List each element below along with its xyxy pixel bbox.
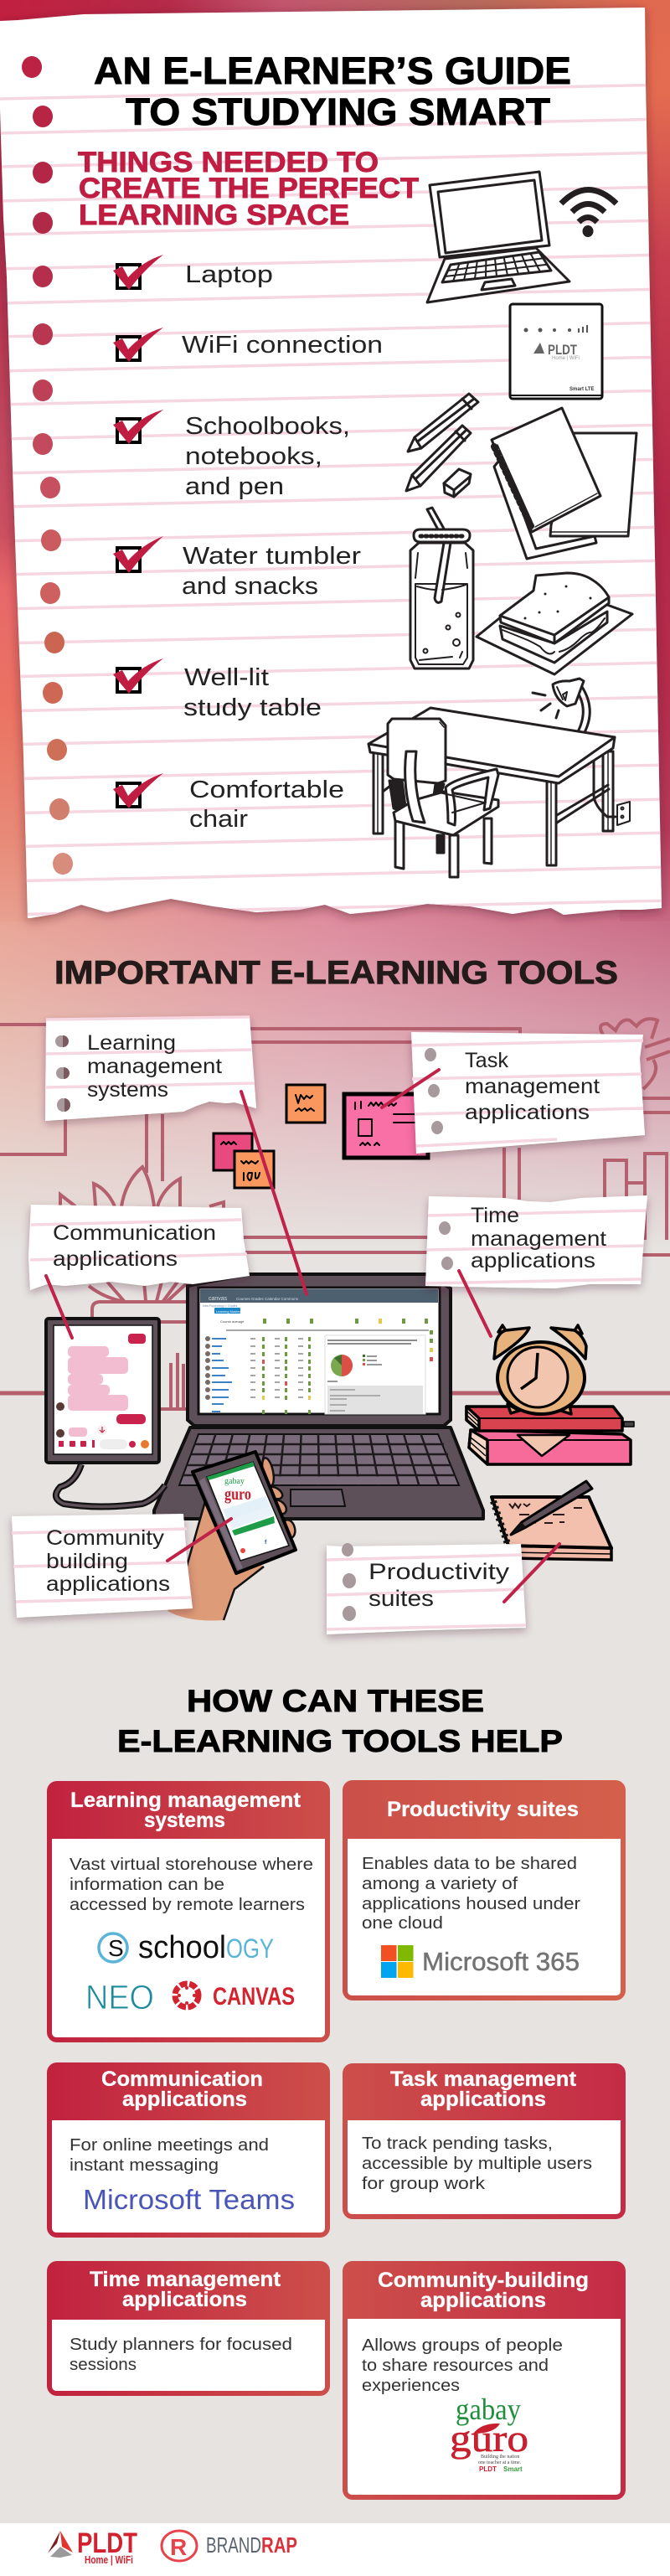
note: community building applications: building: [46, 1550, 128, 1573]
card: learning management systems: Learning management: [70, 1789, 302, 1812]
checklist item: water tumbler: and snacks: [182, 573, 318, 600]
hand holding phone with Gabay Guro: gabay: [224, 1477, 245, 1486]
note: learning management systems: Learning: [87, 1031, 176, 1055]
leader lines from notes to illustration: [46, 1070, 559, 1602]
title: [94, 49, 571, 133]
card: learning management systems: [47, 1781, 330, 2042]
logo: Canvas: [175, 1983, 295, 2011]
card: community-building applications: applications: [420, 2289, 546, 2312]
title: TO STUDYING SMART: [126, 90, 550, 133]
heading: how can these tools help: E-LEARNING TOOLS HELP: [117, 1724, 563, 1758]
screen: canvas gradebook: Intro Psychology > Grades: [203, 1304, 238, 1308]
checklist item: study table: Well-lit: [184, 664, 269, 691]
note: learning management systems: management: [87, 1055, 222, 1078]
logo: Rappler BrandRap: [162, 2531, 297, 2561]
checklist item: water tumbler: [113, 536, 361, 600]
card: productivity suites: among a variety of: [362, 1875, 518, 1893]
logo: PLDT Home WiFi: PLDT: [77, 2527, 137, 2559]
checklist item: study table: [113, 658, 322, 721]
logo: Gabay Guro: [450, 2393, 528, 2473]
checklist item: chair: Comfortable: [189, 777, 344, 803]
icon: study desk and chair: [368, 708, 630, 877]
sticky notes: [214, 1085, 428, 1188]
screen: canvas gradebook: Courses Grades Calendar Commons: [236, 1297, 299, 1301]
icon: PLDT router: Smart LTE: [570, 387, 595, 392]
notepad with pen: [492, 1481, 611, 1560]
heading: things needed: THINGS NEEDED TO: [78, 147, 379, 178]
logo: Gabay Guro: Building the nation: [481, 2455, 519, 2460]
logo: Gabay Guro: Smart: [503, 2465, 523, 2473]
checklist item: water tumbler: Water tumbler: [183, 543, 361, 570]
card: time management applications: Time management: [90, 2268, 281, 2291]
room backdrop line art: [0, 1019, 670, 1410]
icon: PLDT router: Home | WiFi: [552, 356, 580, 361]
card: learning management systems: accessed by remote learners: [70, 1896, 305, 1914]
book stack: [466, 1407, 634, 1464]
clock face: [497, 1342, 585, 1414]
card: communication applications: Communication: [101, 2068, 263, 2091]
laptop with Canvas screen: [154, 1274, 483, 1519]
card: task management applications: applications: [420, 2088, 546, 2111]
card: productivity suites: [343, 1780, 626, 2000]
checklist item: wifi: [113, 328, 383, 362]
heading: things needed: [78, 147, 419, 231]
logo: Rappler BrandRap: RAP: [261, 2532, 297, 2558]
alarm clock on books: [466, 1325, 634, 1464]
card: productivity suites: Enables data to be shared: [362, 1855, 577, 1873]
checklist item: wifi: WiFi connection: [182, 332, 383, 359]
logo: schoology: [99, 1930, 274, 1965]
logo: Gabay Guro: gabay: [456, 2393, 521, 2426]
laptop base and keyboard: [154, 1427, 483, 1519]
logo: Canvas: CANVAS: [213, 1983, 295, 2011]
card: community-building applications: [343, 2261, 626, 2500]
logo: Gabay Guro: PLDT: [479, 2465, 497, 2473]
card: community-building applications: Allows groups of people: [362, 2336, 563, 2355]
logo: NEO: NEO: [85, 1978, 154, 2016]
card: task management applications: To track pending tasks,: [362, 2135, 553, 2153]
card: community-building applications: Community-building: [378, 2269, 589, 2292]
note: learning management systems: systems: [87, 1078, 168, 1102]
card: communication applications: [47, 2062, 330, 2238]
note: task management applications: management: [465, 1075, 600, 1098]
card: time management applications: sessions: [70, 2356, 137, 2374]
laptop lid: [188, 1274, 451, 1426]
note: task management applications: applications: [465, 1101, 590, 1124]
icon: line-art laptop: [427, 172, 570, 302]
icon: PLDT router: [510, 304, 602, 399]
icon: pencils and eraser: [406, 394, 478, 497]
note: communication applications: Communication: [53, 1221, 216, 1245]
checklist item: schoolbooks: notebooks,: [185, 443, 322, 470]
title: AN E-LEARNER’S GUIDE: [94, 49, 571, 92]
note: productivity suites: Productivity: [368, 1559, 510, 1584]
checklist item: schoolbooks: and pen: [185, 473, 284, 500]
logo: Gabay Guro: guro: [450, 2417, 528, 2460]
note: time management applications: [425, 1195, 647, 1288]
note: task management applications: [411, 1032, 645, 1154]
heading: things needed: CREATE THE PERFECT: [79, 173, 419, 204]
logo: schoology: school: [138, 1930, 226, 1965]
hand holding phone with Gabay Guro: f: [265, 1540, 267, 1546]
checklist item: laptop: [113, 255, 273, 290]
logo: schoology: OGY: [226, 1933, 274, 1964]
screen: canvas gradebook: Course average: [220, 1319, 245, 1324]
card: time management applications: applications: [122, 2288, 247, 2311]
screen: canvas gradebook: Learning Mastery: [216, 1309, 242, 1314]
card: community-building applications: experiences: [362, 2377, 460, 2395]
card: community-building applications: to share resources and: [362, 2357, 549, 2375]
note: community building applications: Community: [46, 1526, 165, 1550]
heading: things needed: LEARNING SPACE: [79, 199, 349, 231]
card: learning management systems: information can be: [70, 1876, 224, 1894]
card: learning management systems: systems: [144, 1809, 225, 1832]
note: communication applications: applications: [53, 1247, 178, 1271]
hand holding phone with Gabay Guro: [168, 1452, 297, 1621]
heading: how can these tools help: [117, 1684, 563, 1758]
note: time management applications: Time: [471, 1204, 519, 1227]
note: time management applications: applications: [471, 1249, 595, 1273]
card: communication applications: applications: [122, 2088, 247, 2111]
checklist item: laptop: Laptop: [185, 261, 273, 288]
checklist item: chair: [113, 773, 344, 833]
checklist item: schoolbooks: [113, 410, 350, 500]
footer band: [0, 2523, 670, 2576]
logo: PLDT Home WiFi: [48, 2527, 137, 2566]
icon: sandwich: [477, 573, 632, 674]
card: communication applications: For online meetings and: [70, 2136, 269, 2155]
card: task management applications: accessible by multiple users: [362, 2155, 592, 2173]
screen: canvas gradebook: [198, 1288, 440, 1414]
card: communication applications: instant messaging: [70, 2156, 219, 2175]
logo: PLDT Home WiFi: Home | WiFi: [85, 2553, 133, 2566]
note: productivity suites: [327, 1543, 526, 1634]
note: communication applications: [28, 1205, 250, 1290]
panel: torn notebook paper: [0, 8, 670, 918]
card: task management applications: [343, 2063, 626, 2219]
logo: Rappler BrandRap: BRAND: [206, 2532, 261, 2558]
checklist item: chair: chair: [189, 806, 248, 833]
logo: Microsoft Teams: Microsoft Teams: [83, 2184, 295, 2215]
clock feet and bells: [494, 1325, 586, 1414]
hand holding phone with Gabay Guro: guro: [224, 1485, 251, 1504]
icon: PLDT router: PLDT: [548, 342, 577, 358]
card: productivity suites: Productivity suites: [387, 1798, 579, 1821]
card: time management applications: Study planners for focused: [70, 2336, 292, 2354]
card: time management applications: [47, 2261, 330, 2396]
icon: water tumbler: [410, 508, 473, 669]
tablet with chat app: [46, 1319, 165, 1506]
note: task management applications: Task: [465, 1049, 509, 1072]
icon: notebooks: [492, 408, 636, 559]
heading: how can these tools help: HOW CAN THESE: [187, 1684, 484, 1718]
screen: canvas gradebook: canvas: [209, 1296, 228, 1302]
logo: schoology: S: [108, 1935, 124, 1961]
note: learning management systems: [45, 1016, 256, 1121]
logo: Rappler BrandRap: R: [170, 2534, 187, 2560]
icon: wifi signal: [561, 189, 616, 237]
checklist item: study table: study table: [183, 694, 322, 721]
note: productivity suites: suites: [368, 1586, 434, 1611]
logo: Gabay Guro: one teacher at a time.: [478, 2460, 522, 2465]
note: community building applications: [12, 1514, 193, 1618]
card: learning management systems: Vast virtual storehouse where: [70, 1856, 313, 1874]
note: time management applications: management: [471, 1227, 606, 1251]
logo: Microsoft 365: Microsoft 365: [422, 1947, 580, 1976]
checklist item: schoolbooks: Schoolbooks,: [185, 413, 350, 440]
card: productivity suites: one cloud: [362, 1914, 443, 1933]
card: task management applications: Task management: [390, 2068, 577, 2091]
card: productivity suites: applications housed under: [362, 1895, 580, 1913]
note: community building applications: applications: [46, 1572, 170, 1596]
heading: important e-learning tools: IMPORTANT E-LEARNING TOOLS: [54, 955, 618, 991]
card: task management applications: for group work: [362, 2175, 486, 2193]
icon: desk lamp: [533, 679, 597, 749]
